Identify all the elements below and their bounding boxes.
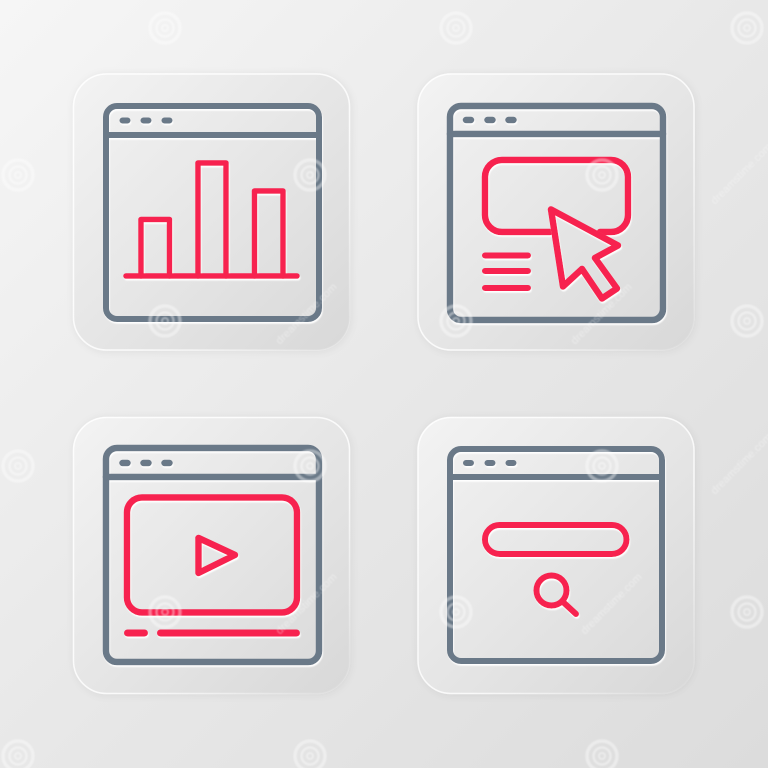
panel: video player window card <box>74 418 350 694</box>
bar chart <box>126 163 297 276</box>
search field <box>485 525 626 554</box>
icon: play triangle <box>198 538 235 573</box>
text lines <box>485 256 528 288</box>
panel: search window card <box>418 418 694 694</box>
watermarks: dreamstime.com <box>274 571 340 637</box>
browser window frame <box>450 449 662 661</box>
watermarks: dreamstime.com <box>569 281 635 347</box>
watermarks: dreamstime.com <box>274 281 340 347</box>
browser window frame <box>106 106 319 319</box>
panel: cursor click window card <box>418 74 694 350</box>
browser window frame <box>450 106 663 320</box>
video player frame <box>127 498 297 612</box>
icon: magnifying glass <box>536 576 576 614</box>
browser window frame <box>106 448 319 662</box>
panel: chart window card <box>74 74 350 350</box>
progress bar <box>124 630 300 636</box>
watermarks: dreamstime.com <box>579 571 645 637</box>
button with cursor gap <box>485 160 628 232</box>
icon: mouse cursor arrow <box>551 210 618 298</box>
